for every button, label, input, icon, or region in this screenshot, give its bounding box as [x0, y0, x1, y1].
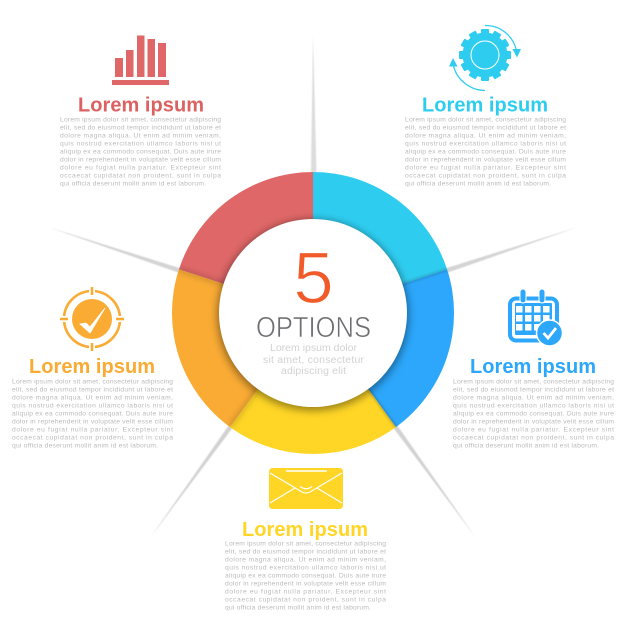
- text block: yellow: occaecat cupidatat non proident, sunt in culpa: [225, 597, 386, 604]
- text block: cyan: [405, 117, 566, 188]
- center caption: adipiscing elit: [281, 365, 346, 377]
- segment: red: [179, 172, 313, 313]
- text block: orange: dolore eu fugiat nulla pariatur. Excepteur sint: [12, 427, 173, 434]
- text block: orange: dolore magna aliqua. Ut enim ad minim veniam,: [12, 395, 173, 402]
- text block: cyan: qui officia deserunt mollit anim id est laborum.: [405, 181, 551, 188]
- text block: orange: occaecat cupidatat non proident, sunt in culpa: [12, 435, 173, 442]
- text block: red: [60, 117, 221, 188]
- icon: bar chart: [112, 36, 169, 85]
- text block: orange: [12, 379, 173, 450]
- text block: cyan: dolor in reprehenderit in voluptate velit esse cillum: [405, 157, 566, 164]
- text block: cyan: Lorem ipsum dolor sit amet, consectetur adipiscing: [405, 117, 566, 124]
- text block: cyan: elit, sed do eiusmod tempor incididunt ut labore et: [405, 125, 566, 132]
- heading: blue: Lorem ipsum: [470, 356, 596, 378]
- center caption: sit amet, consectetur: [263, 354, 364, 366]
- text block: cyan: dolore magna aliqua. Ut enim ad minim veniam,: [405, 133, 566, 140]
- center title: OPTIONS: [256, 312, 371, 344]
- text block: orange: aliquip ex ea commodo consequat. Duis aute irure: [12, 411, 173, 418]
- text block: yellow: dolore magna aliqua. Ut enim ad minim veniam,: [225, 557, 386, 564]
- heading: yellow: Lorem ipsum: [242, 519, 368, 541]
- text block: cyan: occaecat cupidatat non proident, sunt in culpa: [405, 173, 566, 180]
- center caption: Lorem ipsum dolor: [270, 342, 358, 354]
- segment: cyan: [313, 172, 447, 313]
- text block: blue: Lorem ipsum dolor sit amet, consectetur adipiscing: [453, 379, 614, 386]
- text block: red: elit, sed do eiusmod tempor incididunt ut labore et: [60, 125, 221, 132]
- text block: blue: dolore magna aliqua. Ut enim ad minim veniam,: [453, 395, 614, 402]
- center circle shadow: [217, 219, 409, 411]
- text block: yellow: elit, sed do eiusmod tempor incididunt ut labore et: [225, 549, 386, 556]
- text block: yellow: dolore eu fugiat nulla pariatur. Excepteur sint: [225, 589, 386, 596]
- text block: blue: aliquip ex ea commodo consequat. Duis aute irure: [453, 411, 614, 418]
- donut chart: [172, 172, 454, 454]
- icon: calendar with check: [510, 289, 562, 346]
- text block: red: aliquip ex ea commodo consequat. Duis aute irure: [60, 149, 221, 156]
- segment: blue: [313, 269, 454, 427]
- icon: target with check: [59, 286, 125, 352]
- icon: gear with arrows: [449, 25, 521, 91]
- heading: orange: Lorem ipsum: [29, 356, 155, 378]
- text block: cyan: quis nostrud exercitation ullamco laboris nisi ut: [405, 141, 566, 148]
- text block: orange: qui officia deserunt mollit anim id est laborum.: [12, 443, 158, 450]
- center number: 5: [293, 238, 334, 319]
- text block: cyan: dolore eu fugiat nulla pariatur. Excepteur sint: [405, 165, 566, 172]
- segment: orange: [172, 269, 313, 427]
- text block: red: Lorem ipsum dolor sit amet, consectetur adipiscing: [60, 117, 221, 124]
- center caption: [263, 342, 364, 377]
- spokes: [48, 35, 578, 538]
- icon: envelope: [269, 468, 343, 509]
- text block: blue: qui officia deserunt mollit anim id est laborum.: [453, 443, 599, 450]
- center circle: [219, 219, 407, 407]
- text block: orange: dolor in reprehenderit in voluptate velit esse cillum: [12, 419, 173, 426]
- text block: yellow: quis nostrud exercitation ullamco laboris nisi ut: [225, 565, 386, 572]
- text block: yellow: [225, 541, 386, 612]
- text block: blue: [453, 379, 614, 450]
- text block: red: occaecat cupidatat non proident, sunt in culpa: [60, 173, 221, 180]
- text block: blue: elit, sed do eiusmod tempor incididunt ut labore et: [453, 387, 614, 394]
- text block: red: dolor in reprehenderit in voluptate velit esse cillum: [60, 157, 221, 164]
- text block: red: qui officia deserunt mollit anim id est laborum.: [60, 181, 206, 188]
- text block: red: quis nostrud exercitation ullamco laboris nisi ut: [60, 141, 221, 148]
- text block: yellow: Lorem ipsum dolor sit amet, consectetur adipiscing: [225, 541, 386, 548]
- heading: cyan: Lorem ipsum: [422, 95, 548, 117]
- text block: orange: elit, sed do eiusmod tempor incididunt ut labore et: [12, 387, 173, 394]
- text block: blue: dolor in reprehenderit in voluptate velit esse cillum: [453, 419, 614, 426]
- text block: blue: dolore eu fugiat nulla pariatur. Excepteur sint: [453, 427, 614, 434]
- text block: red: dolore eu fugiat nulla pariatur. Excepteur sint: [60, 165, 221, 172]
- segment: yellow: [230, 313, 396, 454]
- text block: yellow: qui officia deserunt mollit anim id est laborum.: [225, 605, 371, 612]
- text block: blue: quis nostrud exercitation ullamco laboris nisi ut: [453, 403, 614, 410]
- heading: red: Lorem ipsum: [78, 95, 204, 117]
- text block: red: dolore magna aliqua. Ut enim ad minim veniam,: [60, 133, 221, 140]
- text block: orange: Lorem ipsum dolor sit amet, consectetur adipiscing: [12, 379, 173, 386]
- text block: yellow: dolor in reprehenderit in voluptate velit esse cillum: [225, 581, 386, 588]
- text block: yellow: aliquip ex ea commodo consequat. Duis aute irure: [225, 573, 386, 580]
- text block: orange: quis nostrud exercitation ullamco laboris nisi ut: [12, 403, 173, 410]
- segment shadows: [178, 266, 448, 428]
- text block: blue: occaecat cupidatat non proident, sunt in culpa: [453, 435, 614, 442]
- text block: cyan: aliquip ex ea commodo consequat. Duis aute irure: [405, 149, 566, 156]
